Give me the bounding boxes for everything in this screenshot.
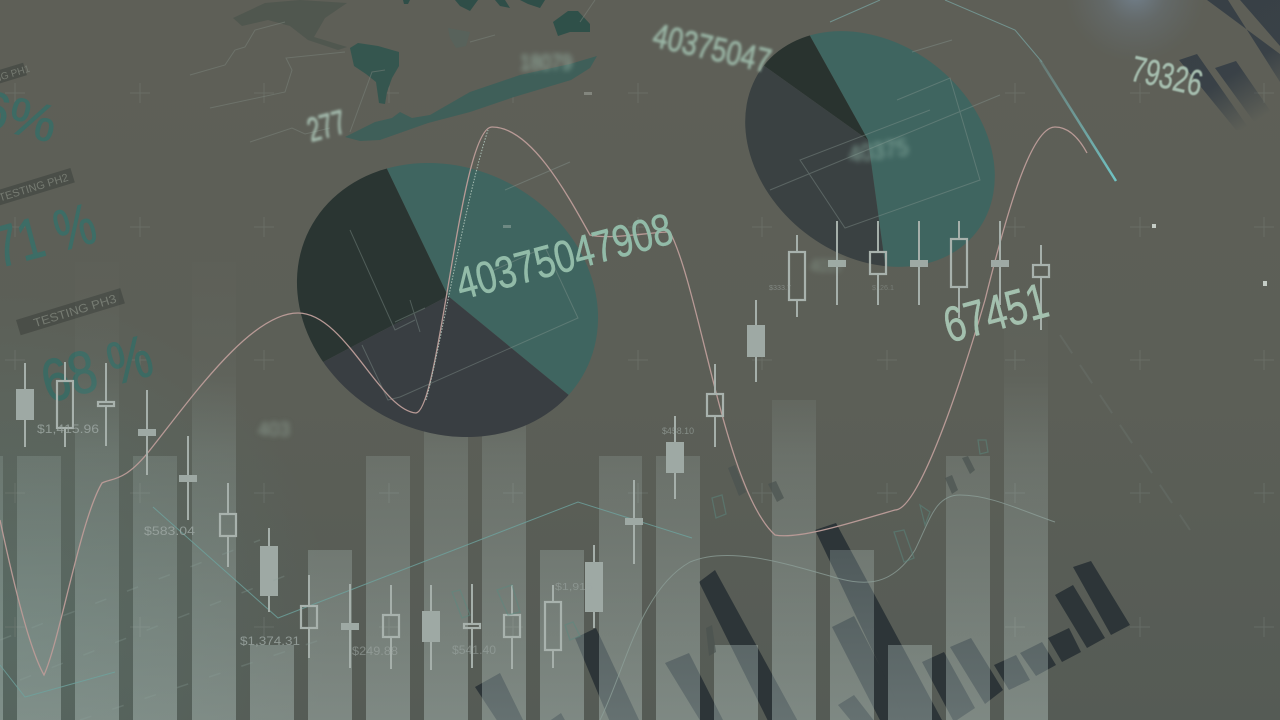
candlestick price labels: $126.1 — [872, 285, 894, 292]
left stats column — [0, 61, 160, 416]
map: africa faint — [448, 28, 470, 48]
tag: testing ph3: TESTING PH3 — [32, 292, 118, 330]
pie 2 slice: teal — [810, 31, 995, 267]
cyan diagonal line — [830, 0, 1116, 181]
pie 1 slice: dark — [297, 168, 448, 362]
hollow candle bodies — [57, 239, 1049, 650]
pie 1 slice: slate — [323, 296, 568, 437]
large number: 40375047908: 40375047908 — [450, 203, 678, 310]
teal line series — [0, 502, 692, 697]
tag: testing ph3 — [16, 288, 125, 335]
candlestick price labels: $333.7 — [769, 285, 791, 292]
number: 67451: 67451 — [937, 272, 1054, 354]
vertical bar chart — [0, 262, 1048, 720]
faint teal outlines — [452, 440, 988, 640]
candlestick price labels: $1,374.31 — [240, 634, 300, 648]
map: north america — [233, 0, 347, 50]
pie 2 slice: dark wedge — [764, 36, 868, 140]
dotted rising line — [426, 130, 488, 400]
candle wicks — [25, 221, 1041, 670]
pale smooth line series — [600, 495, 1055, 720]
candlestick price labels: $1,415.96 — [37, 422, 99, 436]
pie 1 slice: teal — [387, 163, 598, 395]
map: antarctica strip — [345, 56, 597, 141]
number: 79326: 79326 — [1127, 48, 1207, 104]
number: 277: 277 — [303, 103, 350, 150]
map: australia — [553, 11, 590, 36]
candlestick price labels: $541.40 — [452, 643, 496, 657]
map: south america — [350, 43, 399, 104]
map: asia fragments — [403, 0, 545, 11]
thin overlay frames on pies — [350, 40, 1000, 400]
blurred number lower: 403 — [258, 419, 290, 441]
blurred number by candles: 4037 — [810, 256, 844, 276]
pie chart: small — [745, 31, 995, 267]
world map — [190, 0, 597, 142]
pink line series — [0, 127, 1087, 675]
candlestick price labels: $1,915 — [555, 582, 594, 593]
candlestick price labels: $249.88 — [352, 644, 398, 658]
small white dots — [503, 92, 1267, 286]
top right dark bars — [1179, 0, 1280, 130]
number: 40375047 blurred: 40375047 — [649, 17, 775, 81]
faint dashed streaks — [0, 540, 320, 720]
candlestick chart — [16, 221, 1049, 670]
dark rotated bar chart — [475, 523, 1130, 720]
filled candle bodies — [16, 260, 1009, 642]
pie chart: large — [297, 163, 598, 437]
stat: percent three: 68 % — [34, 322, 160, 416]
blurred number on pie 2: 40375 — [847, 134, 910, 169]
crosshair grid — [5, 83, 1274, 637]
candlestick price labels: $458.10 — [662, 426, 694, 436]
candlestick price labels: $583.04 — [144, 524, 195, 538]
small dark ticks — [706, 456, 975, 656]
blurred number on map: 18079 — [520, 50, 572, 75]
map: leader lines — [190, 0, 595, 142]
candlestick price labels — [37, 285, 894, 658]
pie 2 slice: slate — [745, 66, 885, 266]
faint right diagonal streak — [1060, 335, 1190, 530]
